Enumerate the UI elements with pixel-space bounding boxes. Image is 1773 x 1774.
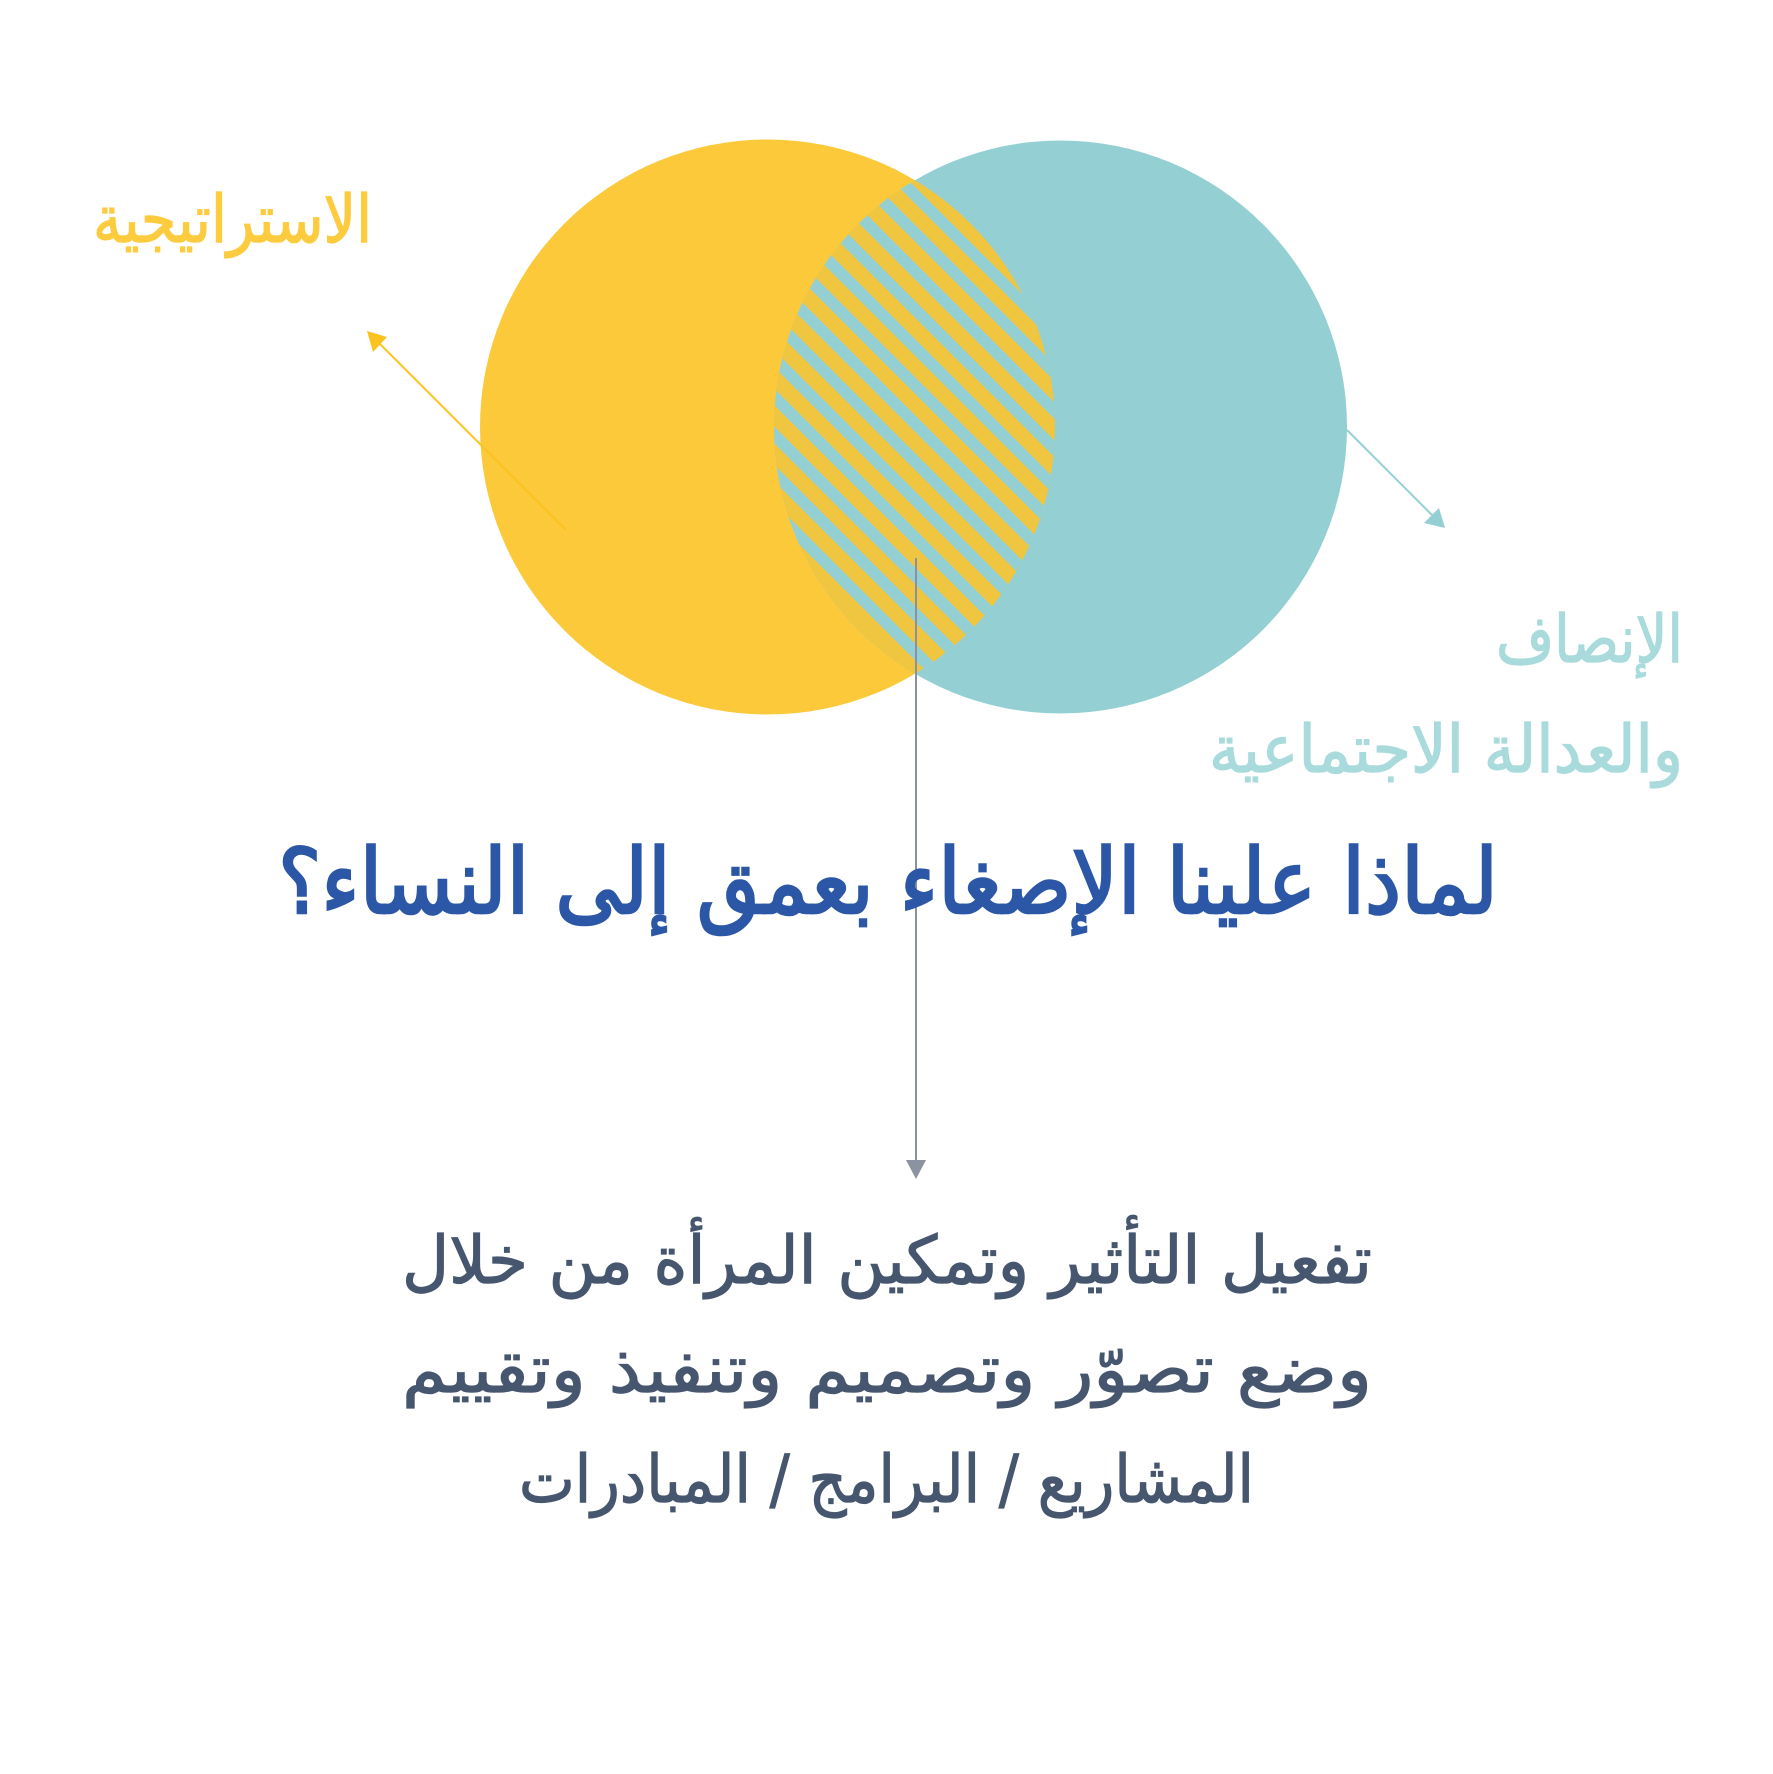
label: equity and social justice: الإنصاف <box>1496 601 1683 678</box>
arrow: yellow, to strategy label <box>367 331 566 530</box>
body text: وضع تصوّر وتصميم وتنفيذ وتقييم <box>402 1331 1372 1408</box>
arrow: teal, to equity label <box>1347 430 1445 528</box>
label: equity and social justice <box>1209 601 1683 788</box>
yellow circle: strategy <box>480 140 1055 714</box>
label: strategy: الاستراتيجية <box>93 181 372 258</box>
title: لماذا علينا الإصغاء بعمق إلى النساء؟ <box>278 830 1498 936</box>
body text <box>402 1215 1372 1518</box>
infographic canvas <box>96 140 1679 1519</box>
hatched overlap of the two circles <box>774 180 1055 674</box>
label: equity and social justice: والعدالة الاجتماعية <box>1209 711 1683 788</box>
body text: تفعيل التأثير وتمكين المرأة من خلال <box>402 1215 1372 1299</box>
teal circle: equity and social justice <box>774 140 1347 714</box>
body text: المشاريع / البرامج / المبادرات <box>519 1441 1254 1518</box>
venn diagram <box>480 140 1347 714</box>
arrow: grey, from overlap to body text <box>906 558 926 1179</box>
